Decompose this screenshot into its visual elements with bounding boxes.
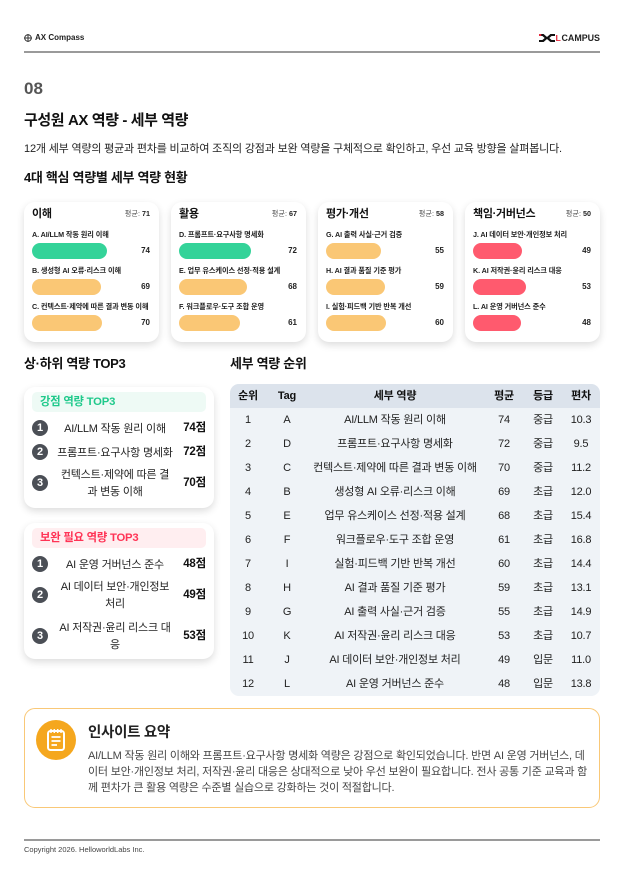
panel: 활용: 평균: 67 xyxy=(272,209,297,218)
table: 세부 역량 순위: 초급 xyxy=(533,606,553,618)
table: 세부 역량 순위: 59 xyxy=(498,582,510,594)
table: 세부 역량 순위: 53 xyxy=(498,630,510,642)
panel: 평가·개선: 55 xyxy=(435,246,444,255)
panel: 강점 역량 TOP3: 2 xyxy=(37,446,43,458)
table: 세부 역량 순위: AI 저작권·윤리 리스크 대응 xyxy=(334,630,456,642)
table: 세부 역량 순위: 14.4 xyxy=(571,558,591,570)
table: 세부 역량 순위: 60 xyxy=(498,558,510,570)
table: 세부 역량 순위: 8 xyxy=(245,582,251,594)
table: 세부 역량 순위: 48 xyxy=(498,678,510,690)
table: 세부 역량 순위: 61 xyxy=(498,534,510,546)
insight title: 인사이트 요약 xyxy=(88,725,170,741)
description: 12개 세부 역량의 평균과 편차를 비교하여 조직의 강점과 보완 역량을 구체적으로 확인하고, 우선 교육 방향을 살펴봅니다. xyxy=(24,143,562,155)
panel: 활용: 68 xyxy=(288,282,297,291)
table: 세부 역량 순위: 13.1 xyxy=(571,582,591,594)
table: 세부 역량 순위: 입문 xyxy=(533,678,553,690)
table: 세부 역량 순위: 3 xyxy=(245,462,251,474)
table: 세부 역량 순위: A xyxy=(283,414,291,426)
table: 세부 역량 순위: 초급 xyxy=(533,558,553,570)
table: 세부 역량 순위: H xyxy=(283,582,291,594)
panel: 책임·거버넌스: K. AI 저작권·윤리 리스크 대응 xyxy=(473,266,562,275)
panel: 강점 역량 TOP3 xyxy=(24,387,214,508)
table: 세부 역량 순위: 편차 xyxy=(571,390,591,402)
table: 세부 역량 순위: 7 xyxy=(245,558,251,570)
header logo: LCAMPUS: L xyxy=(556,33,561,43)
insight body: AI/LLM 작동 원리 이해와 프롬프트·요구사항 명세화 역량은 강점으로 확인되었습니다. 반면 AI 운영 거버넌스, 데 xyxy=(88,750,585,762)
table: 세부 역량 순위: 2 xyxy=(245,438,251,450)
panel: 인사이트 요약 xyxy=(24,708,600,808)
panel: 이해: 평균: 71 xyxy=(125,209,150,218)
table: 세부 역량 순위: 초급 xyxy=(533,630,553,642)
insight body: 이터 보안·개인정보 처리, 저작권·윤리 대응은 상대적으로 낮아 우선 보완이 필요합니다. 전사 공통 기준 교육과 함 xyxy=(88,766,587,778)
panel: 활용: 활용 xyxy=(179,208,199,220)
table: 세부 역량 순위: 10.7 xyxy=(571,630,591,642)
panel: 평가·개선: 60 xyxy=(435,318,444,327)
panel: 이해: 69 xyxy=(141,282,150,291)
header logo: AX Compass: AX Compass xyxy=(35,33,84,42)
table: 세부 역량 순위: 74 xyxy=(498,414,510,426)
table: 세부 역량 순위: 등급 xyxy=(533,390,553,402)
panel: 보완 필요 역량 TOP3: 53점 xyxy=(183,630,206,642)
panel: 보완 필요 역량 TOP3: 처리 xyxy=(105,598,125,610)
panel: 평가·개선: 평균: 58 xyxy=(419,209,444,218)
table: 세부 역량 순위: 초급 xyxy=(533,510,553,522)
table: 세부 역량 순위: 업무 유스케이스 선정·적용 설계 xyxy=(324,510,466,522)
panel: 책임·거버넌스 xyxy=(465,202,600,342)
panel: 강점 역량 TOP3: 강점 역량 TOP3 xyxy=(40,396,115,408)
table: 세부 역량 순위: 12 xyxy=(242,678,254,690)
table: 세부 역량 순위: G xyxy=(283,606,291,618)
table: 세부 역량 순위: 중급 xyxy=(533,462,553,474)
table: 세부 역량 순위: AI 데이터 보안·개인정보 처리 xyxy=(329,654,461,666)
table: 세부 역량 순위: 12.0 xyxy=(571,486,591,498)
panel: 이해: B. 생성형 AI 오류·리스크 이해 xyxy=(32,266,121,275)
panel: 보완 필요 역량 TOP3: 2 xyxy=(37,589,43,601)
table: 세부 역량 순위: 15.4 xyxy=(571,510,591,522)
panel: 이해: 70 xyxy=(141,318,150,327)
panel: 책임·거버넌스: L. AI 운영 거버넌스 준수 xyxy=(473,302,546,311)
table: 세부 역량 순위: 10.3 xyxy=(571,414,591,426)
header logo: LCAMPUS: CAMPUS xyxy=(562,33,600,43)
table: 세부 역량 순위: 10 xyxy=(242,630,254,642)
table: 세부 역량 순위: E xyxy=(283,510,291,522)
table: 세부 역량 순위: 순위 xyxy=(238,390,258,402)
panel: 활용: 72 xyxy=(288,246,297,255)
panel: 강점 역량 TOP3: 과 변동 이해 xyxy=(87,486,143,498)
panel: 책임·거버넌스: 49 xyxy=(582,246,591,255)
icon: notepad xyxy=(36,720,76,760)
table: 세부 역량 순위: Tag xyxy=(278,390,296,402)
table: 세부 역량 순위: AI 운영 거버넌스 준수 xyxy=(346,678,444,690)
section heading: core competencies: 4대 핵심 역량별 세부 역량 현황 xyxy=(24,170,187,185)
table: 세부 역량 순위: 1 xyxy=(245,414,251,426)
panel: 활용: F. 워크플로우·도구 조합 운영 xyxy=(179,302,264,311)
table: 세부 역량 순위: F xyxy=(284,534,290,546)
panel: 강점 역량 TOP3: 3 xyxy=(37,477,43,489)
table: 세부 역량 순위: C xyxy=(283,462,291,474)
panel: 강점 역량 TOP3: 70점 xyxy=(183,477,206,489)
table: 세부 역량 순위: AI 출력 사실·근거 검증 xyxy=(344,606,446,618)
panel: 평가·개선: H. AI 결과 품질 기준 평가 xyxy=(326,266,401,275)
panel: 보완 필요 역량 TOP3: AI 데이터 보안·개인정보 xyxy=(61,581,169,593)
table: 세부 역량 순위: 생성형 AI 오류·리스크 이해 xyxy=(334,486,456,498)
table: 세부 역량 순위: 중급 xyxy=(533,438,553,450)
panel: 강점 역량 TOP3: 컨텍스트·제약에 따른 결 xyxy=(61,469,169,481)
table: 세부 역량 순위: D xyxy=(283,438,291,450)
panel: 강점 역량 TOP3: 72점 xyxy=(183,446,206,458)
table: 세부 역량 순위: 9.5 xyxy=(574,438,588,450)
table: 세부 역량 순위: 세부 역량 xyxy=(374,390,416,402)
panel: 이해: A. AI/LLM 작동 원리 이해 xyxy=(32,230,109,239)
table: 세부 역량 순위: L xyxy=(284,678,290,690)
table: 세부 역량 순위: 4 xyxy=(245,486,251,498)
panel: 이해: 74 xyxy=(141,246,150,255)
insight body: 께 편차가 큰 활용 역량은 수준별 실습으로 강화하는 것이 적절합니다. xyxy=(88,782,394,794)
panel: 활용: E. 업무 유스케이스 선정·적용 설계 xyxy=(179,266,280,275)
table: 세부 역량 순위: 9 xyxy=(245,606,251,618)
panel: 평가·개선: I. 실험·피드백 기반 반복 개선 xyxy=(326,302,411,311)
table: 세부 역량 순위: 72 xyxy=(498,438,510,450)
table: 세부 역량 순위: 49 xyxy=(498,654,510,666)
panel: 강점 역량 TOP3: 프롬프트·요구사항 명세화 xyxy=(57,447,173,459)
panel: 보완 필요 역량 TOP3: 응 xyxy=(110,639,120,651)
panel: 활용: D. 프롬프트·요구사항 명세화 xyxy=(179,230,264,239)
panel: 책임·거버넌스: 평균: 50 xyxy=(566,209,591,218)
table: 세부 역량 순위: 프롬프트·요구사항 명세화 xyxy=(337,438,453,450)
panel: 평가·개선: G. AI 출력 사실·근거 검증 xyxy=(326,230,402,239)
panel: 책임·거버넌스: J. AI 데이터 보안·개인정보 처리 xyxy=(473,230,567,239)
insight body xyxy=(88,750,587,794)
title: 구성원 AX 역량 - 세부 역량 xyxy=(24,112,188,129)
header logo: LCAMPUS xyxy=(539,33,600,43)
table: 세부 역량 순위: 11.2 xyxy=(571,462,591,474)
panel: 강점 역량 TOP3: 1 xyxy=(37,422,43,434)
panel: 보완 필요 역량 TOP3: 1 xyxy=(37,558,43,570)
table: 세부 역량 순위: 55 xyxy=(498,606,510,618)
panel: 보완 필요 역량 TOP3: AI 운영 거버넌스 준수 xyxy=(66,559,164,571)
panel: 이해: 이해 xyxy=(32,208,52,220)
section heading: ranking: 세부 역량 순위 xyxy=(230,356,307,371)
table: 세부 역량 순위: 평균 xyxy=(494,390,514,402)
table: 세부 역량 순위: I xyxy=(286,558,288,570)
panel: 강점 역량 TOP3: 74점 xyxy=(183,422,206,434)
section heading: top3: 상·하위 역량 TOP3 xyxy=(24,356,125,371)
table: 세부 역량 순위: 14.9 xyxy=(571,606,591,618)
panel: 보완 필요 역량 TOP3: 보완 필요 역량 TOP3 xyxy=(40,532,138,544)
footer copyright: Copyright 2026. HelloworldLabs Inc. xyxy=(24,845,144,854)
panel: 보완 필요 역량 TOP3: 48점 xyxy=(183,558,206,570)
table: 세부 역량 순위: 중급 xyxy=(533,414,553,426)
table: 세부 역량 순위: 69 xyxy=(498,486,510,498)
table: 세부 역량 순위: AI/LLM 작동 원리 이해 xyxy=(344,414,446,426)
table: 세부 역량 순위: 13.8 xyxy=(571,678,591,690)
panel: 평가·개선: 59 xyxy=(435,282,444,291)
table: 세부 역량 순위: 입문 xyxy=(533,654,553,666)
table: 세부 역량 순위: 16.8 xyxy=(571,534,591,546)
table: 세부 역량 순위: 6 xyxy=(245,534,251,546)
table: 세부 역량 순위: 초급 xyxy=(533,582,553,594)
panel: 보완 필요 역량 TOP3: AI 저작권·윤리 리스크 대 xyxy=(59,622,171,634)
table: 세부 역량 순위 xyxy=(230,384,600,696)
panel: 평가·개선: 평가·개선 xyxy=(326,208,369,220)
panel: 보완 필요 역량 TOP3 xyxy=(24,523,214,659)
panel: 책임·거버넌스: 48 xyxy=(582,318,591,327)
table: 세부 역량 순위: 실험·피드백 기반 반복 개선 xyxy=(334,558,456,570)
table: 세부 역량 순위: 11.0 xyxy=(571,654,591,666)
panel: 보완 필요 역량 TOP3: 3 xyxy=(37,630,43,642)
panel: 책임·거버넌스: 53 xyxy=(582,282,591,291)
table: 세부 역량 순위: B xyxy=(283,486,291,498)
table: 세부 역량 순위: 70 xyxy=(498,462,510,474)
table: 세부 역량 순위: 11 xyxy=(242,654,254,666)
panel: 보완 필요 역량 TOP3: 49점 xyxy=(183,589,206,601)
panel: 활용 xyxy=(171,202,306,342)
table: 세부 역량 순위: 5 xyxy=(245,510,251,522)
table: 세부 역량 순위: 워크플로우·도구 조합 운영 xyxy=(336,534,454,546)
panel: 평가·개선 xyxy=(318,202,453,342)
table: 세부 역량 순위: AI 결과 품질 기준 평가 xyxy=(345,582,445,594)
table: 세부 역량 순위: 초급 xyxy=(533,534,553,546)
panel: 활용: 61 xyxy=(288,318,297,327)
table: 세부 역량 순위: 컨텍스트·제약에 따른 결과 변동 이해 xyxy=(313,462,477,474)
table: 세부 역량 순위: 68 xyxy=(498,510,510,522)
panel: 이해 xyxy=(24,202,159,342)
table: 세부 역량 순위: J xyxy=(284,654,290,666)
panel: 강점 역량 TOP3: AI/LLM 작동 원리 이해 xyxy=(64,423,166,435)
table: 세부 역량 순위: K xyxy=(283,630,291,642)
panel: 책임·거버넌스: 책임·거버넌스 xyxy=(473,208,535,220)
table: 세부 역량 순위: 초급 xyxy=(533,486,553,498)
panel: 이해: C. 컨텍스트·제약에 따른 결과 변동 이해 xyxy=(32,302,148,311)
page number: 08 xyxy=(24,79,43,98)
